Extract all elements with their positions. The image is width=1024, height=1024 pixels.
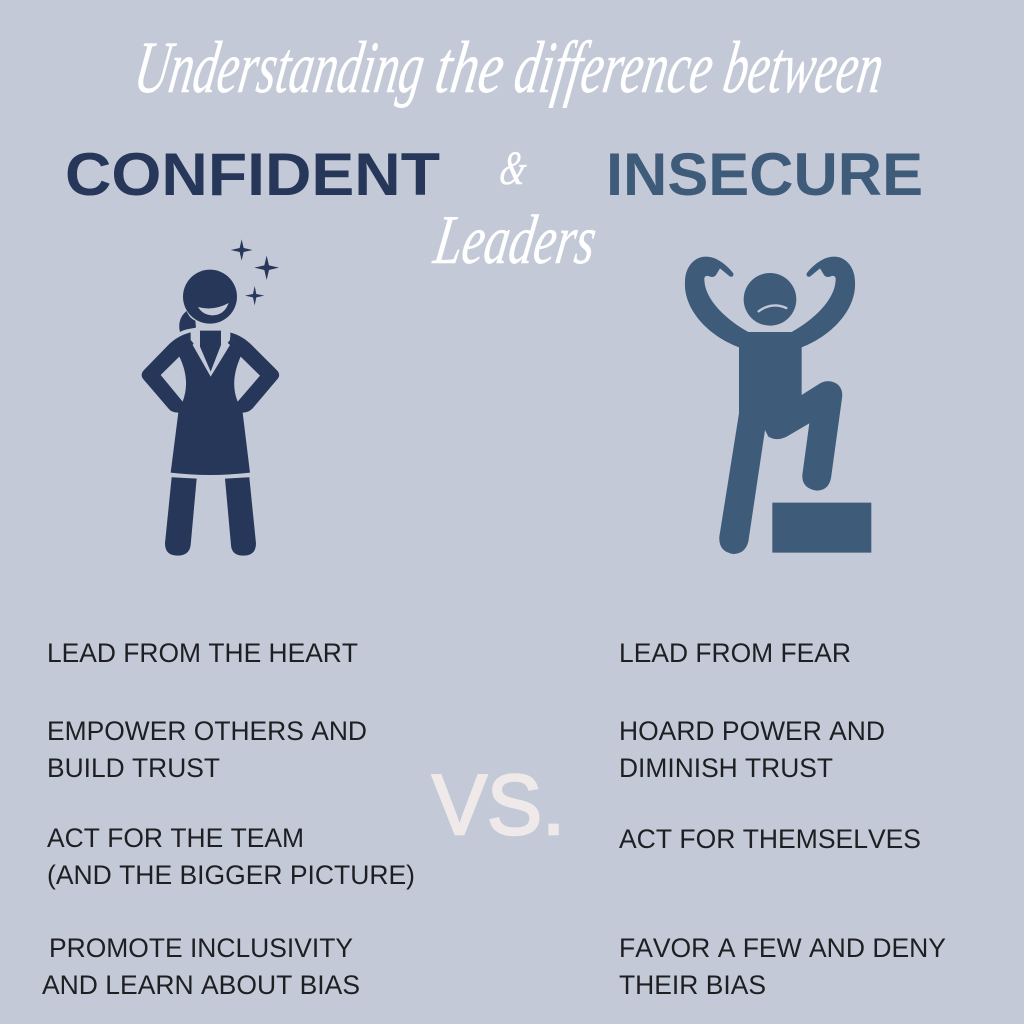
vs label: VS. (432, 758, 565, 853)
icon: insecure man on step (685, 257, 871, 554)
title: between (718, 27, 889, 109)
list: insecure traits: ACT FOR THEMSELVES (619, 824, 921, 854)
list: insecure traits (619, 638, 946, 1000)
list: confident traits: LEAD FROM THE HEART (47, 638, 358, 668)
list: insecure traits: FAVOR A FEW AND DENY (619, 933, 946, 963)
list: confident traits: ACT FOR THE TEAM (47, 823, 304, 853)
title: Understanding (129, 27, 430, 109)
heading: confident: CONFIDENT (65, 141, 440, 208)
list: insecure traits: HOARD POWER AND (619, 716, 885, 746)
list: confident traits: AND LEARN ABOUT BIAS (42, 970, 360, 1000)
list: confident traits (42, 638, 415, 1000)
list: confident traits: BUILD TRUST (47, 753, 220, 783)
list: insecure traits: DIMINISH TRUST (619, 753, 833, 783)
title: difference (509, 27, 719, 109)
list: confident traits: EMPOWER OTHERS AND (47, 716, 367, 746)
heading: insecure: INSECURE (606, 141, 923, 208)
icon: confident woman (142, 239, 279, 556)
list: insecure traits: LEAD FROM FEAR (619, 638, 851, 668)
title: the (430, 27, 510, 109)
ampersand: & (496, 142, 531, 195)
list: insecure traits: THEIR BIAS (619, 970, 766, 1000)
subtitle: leaders: Leaders (429, 201, 602, 279)
list: confident traits: PROMOTE INCLUSIVITY (49, 933, 353, 963)
list: confident traits: (AND THE BIGGER PICTURE) (47, 860, 415, 890)
title (129, 27, 889, 109)
